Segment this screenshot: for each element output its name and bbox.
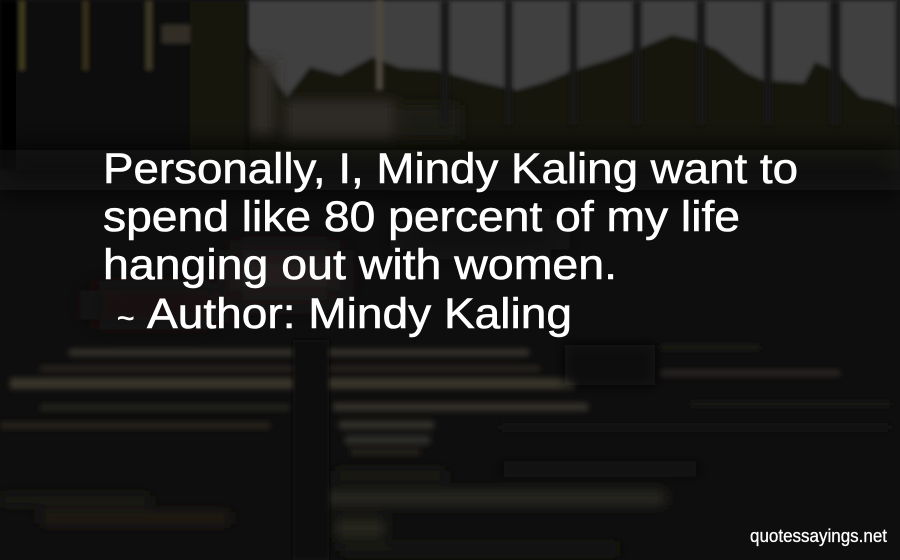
post shadow: [293, 340, 329, 560]
sky and tree line: [247, 0, 900, 170]
left dark trunks: [0, 0, 247, 170]
author name: Author: Mindy Kaling: [147, 290, 572, 338]
quote line 3: hanging out with women.: [103, 241, 617, 289]
quote text: [103, 145, 798, 289]
lit foliage: [250, 60, 460, 140]
lower soft planks: [0, 465, 700, 553]
quote line 2: spend like 80 percent of my life: [103, 193, 740, 241]
tilde: ~: [117, 302, 135, 335]
author attribution: [117, 290, 572, 338]
right dark boardwalk shadow: [565, 345, 655, 385]
boardwalk planks: [0, 345, 890, 455]
faint boards behind the quote: [0, 150, 900, 320]
watermark: quotessayings.net: [750, 526, 887, 546]
fence posts: [376, 0, 900, 125]
quote line 1: Personally, I, Mindy Kaling want to: [103, 145, 798, 193]
